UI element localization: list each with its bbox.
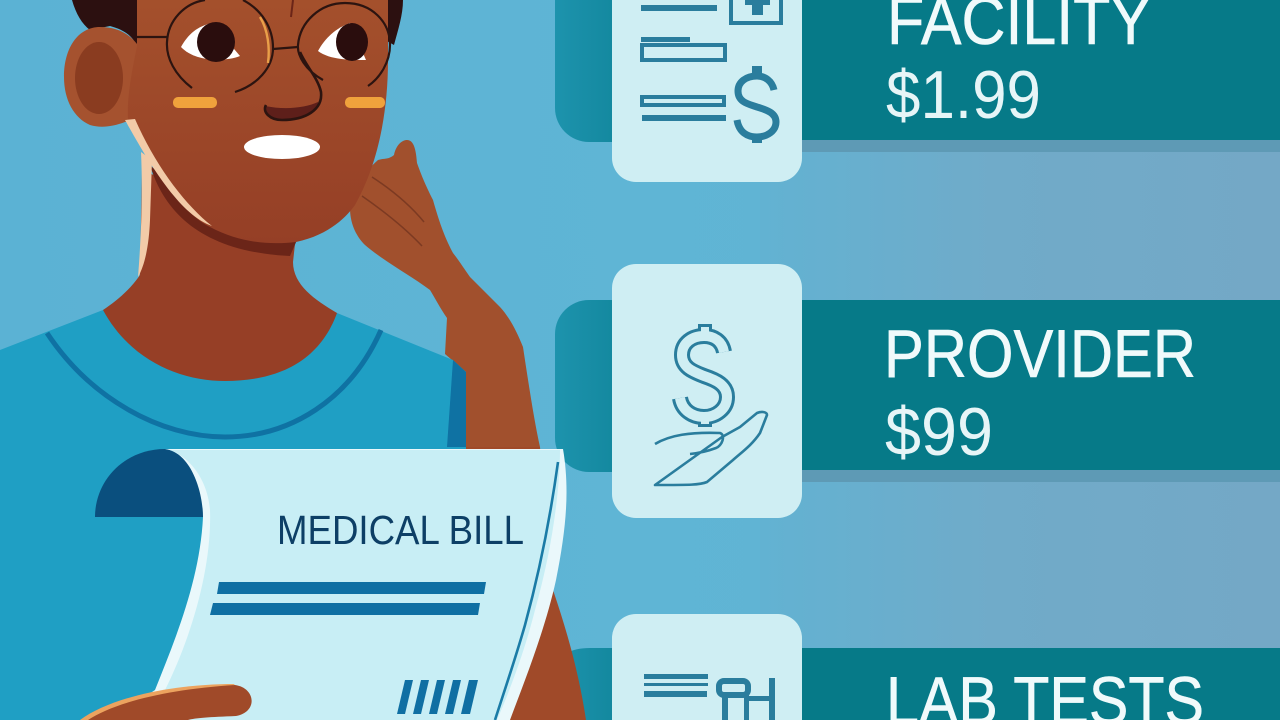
neck shadow — [150, 165, 297, 256]
provider band — [790, 300, 1280, 470]
holding hand outline — [80, 684, 235, 720]
icon: lab tubes and lines — [644, 674, 775, 720]
jaw highlight — [125, 119, 212, 226]
bill title: MEDICAL BILL — [277, 507, 524, 553]
shirt — [0, 310, 466, 720]
lab tests tab — [555, 648, 640, 720]
lower arm behind bill — [440, 447, 586, 720]
facility price: $1.99 — [886, 57, 1041, 133]
forearm and hand — [350, 140, 540, 447]
light band backgrounds — [760, 140, 1280, 648]
hair — [72, 0, 403, 46]
ear — [64, 27, 140, 127]
bill lines — [210, 582, 486, 615]
person — [0, 0, 586, 720]
bill paper — [125, 450, 560, 720]
eyes — [181, 22, 368, 62]
mouth — [244, 135, 320, 159]
shirt sleeve shadow — [447, 360, 466, 447]
lab tests band — [790, 648, 1280, 720]
bill curl — [95, 449, 205, 517]
right cheek mark — [345, 97, 385, 108]
nostril — [265, 102, 318, 120]
face — [128, 0, 388, 243]
neck — [103, 170, 337, 381]
facility card — [612, 0, 802, 182]
row: provider — [555, 264, 1280, 518]
collar line — [47, 330, 381, 437]
provider label: PROVIDER — [884, 316, 1196, 392]
facility band — [790, 0, 1280, 140]
lab tests card — [612, 614, 802, 720]
row: lab tests — [555, 614, 1280, 720]
provider tab — [555, 300, 645, 472]
finger creases — [362, 177, 424, 246]
glasses — [137, 0, 390, 92]
inner ear — [75, 42, 123, 114]
bill paper edge — [110, 449, 567, 720]
facility tab — [555, 0, 645, 142]
hair strand — [138, 152, 152, 277]
forehead wrinkle — [291, 0, 293, 17]
barcode — [397, 680, 478, 714]
icon: hand holding dollar — [655, 324, 767, 485]
bill edge line — [495, 462, 558, 720]
nose — [265, 52, 321, 120]
medical bill — [80, 449, 567, 720]
icon: facility bill with cross and dollar — [641, 0, 781, 143]
left cheek mark — [173, 97, 217, 108]
row: facility — [555, 0, 1280, 182]
holding hand — [88, 685, 252, 720]
provider card — [612, 264, 802, 518]
provider price: $99 — [885, 394, 993, 470]
